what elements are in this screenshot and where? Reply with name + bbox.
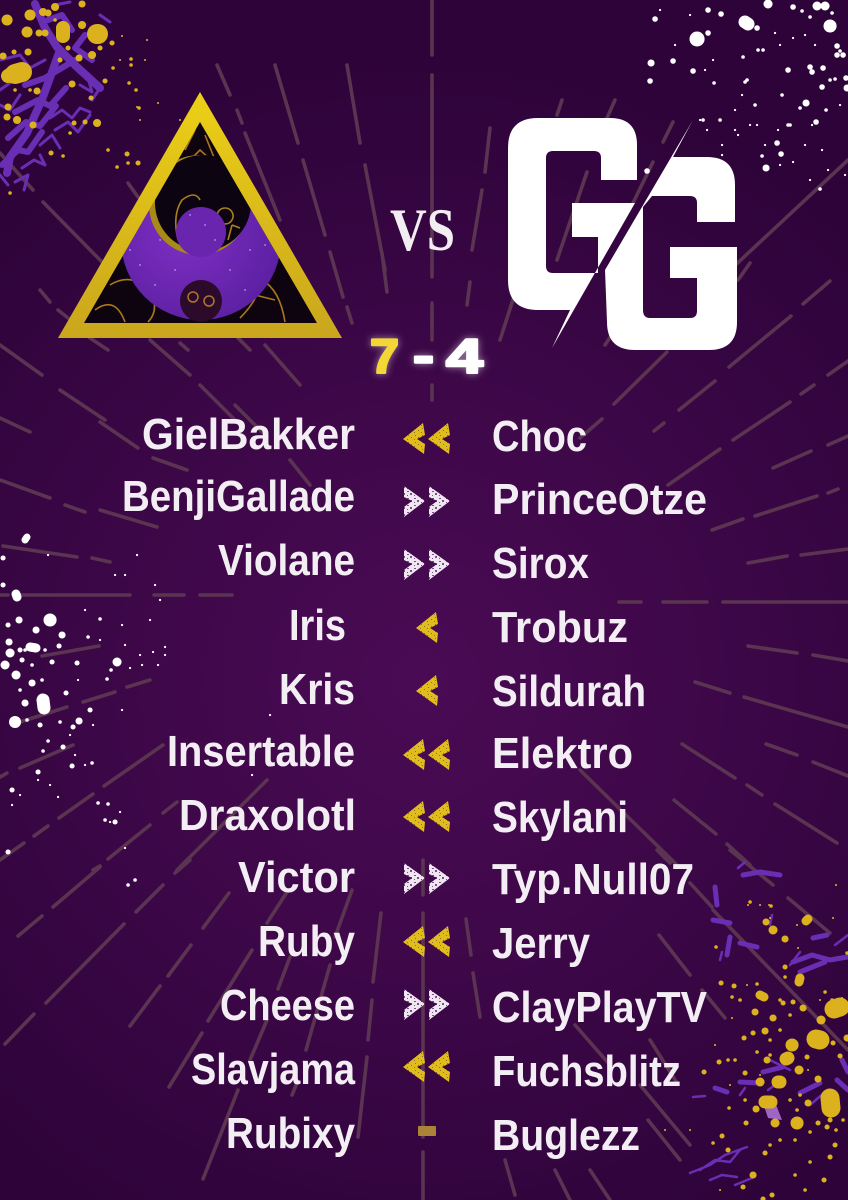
right team player names: PrinceOtze <box>492 475 707 524</box>
draw marker row 12 <box>418 1126 436 1136</box>
left team player names: GielBakker <box>142 410 355 459</box>
right team player names: Sirox <box>492 539 589 588</box>
splatter: purple and gold, bottom right <box>665 862 848 1199</box>
right team player names: Skylani <box>492 793 628 842</box>
left team player names: Cheese <box>220 981 355 1030</box>
left team player names: Insertable <box>167 727 355 776</box>
splatter: white, top right <box>647 4 847 189</box>
left team player names: Kris <box>279 665 355 714</box>
score <box>370 330 483 384</box>
right team player names: Sildurah <box>492 667 646 716</box>
right team player names: Trobuz <box>492 603 628 652</box>
emblem dark cut-out <box>155 155 251 251</box>
left team player names: Iris <box>289 601 346 650</box>
score: 4 <box>446 331 483 384</box>
emblem gold frame <box>58 92 342 338</box>
score: 7 <box>370 331 399 384</box>
arrow row 3 <box>404 549 450 580</box>
arrow row 2 <box>404 486 450 517</box>
arrow row 6 <box>403 739 450 770</box>
left team player names: BenjiGallade <box>122 472 355 521</box>
left team player names: Ruby <box>258 917 355 966</box>
right team player names: Typ.Null07 <box>492 855 694 904</box>
splatter: purple and gold, top left <box>0 2 192 193</box>
left team player names <box>122 410 356 1158</box>
right team player names <box>492 412 708 1160</box>
emblem inner artwork <box>80 118 320 328</box>
result arrows <box>403 423 450 1136</box>
arrow row 10 <box>404 989 450 1020</box>
score: - <box>413 330 434 383</box>
right team player names: Choc <box>492 412 587 461</box>
right team player names: Elektro <box>492 729 633 778</box>
arrow row 11 <box>403 1051 450 1082</box>
right team player names: Jerry <box>492 919 590 968</box>
right team player names: Fuchsblitz <box>492 1047 681 1096</box>
logo: white GG <box>508 118 737 350</box>
right team player names: ClayPlayTV <box>492 983 708 1032</box>
arrow row 7 <box>403 801 450 832</box>
right team player names: Buglezz <box>492 1111 640 1160</box>
versus label: VS <box>390 197 455 263</box>
left team player names: Draxolotl <box>179 791 356 840</box>
left team player names: Slavjama <box>191 1045 355 1094</box>
emblem inner purple circle <box>176 207 226 257</box>
emblem gold line work <box>176 195 240 240</box>
arrow row 4 <box>416 612 438 643</box>
arrow row 8 <box>404 863 450 894</box>
emblem gold crescent <box>149 155 249 255</box>
splatter: white, left <box>3 537 270 885</box>
left team player names: Victor <box>238 853 355 902</box>
arrow row 5 <box>416 675 438 706</box>
arrow row 9 <box>403 926 450 957</box>
emblem purple disc <box>121 160 281 320</box>
left team player names: Violane <box>218 536 355 585</box>
logo: gold triangle emblem <box>58 92 342 338</box>
emblem lower dark circle <box>180 280 222 322</box>
left team player names: Rubixy <box>226 1109 355 1158</box>
arrow row 1 <box>403 423 450 454</box>
emblem stars <box>130 215 265 290</box>
